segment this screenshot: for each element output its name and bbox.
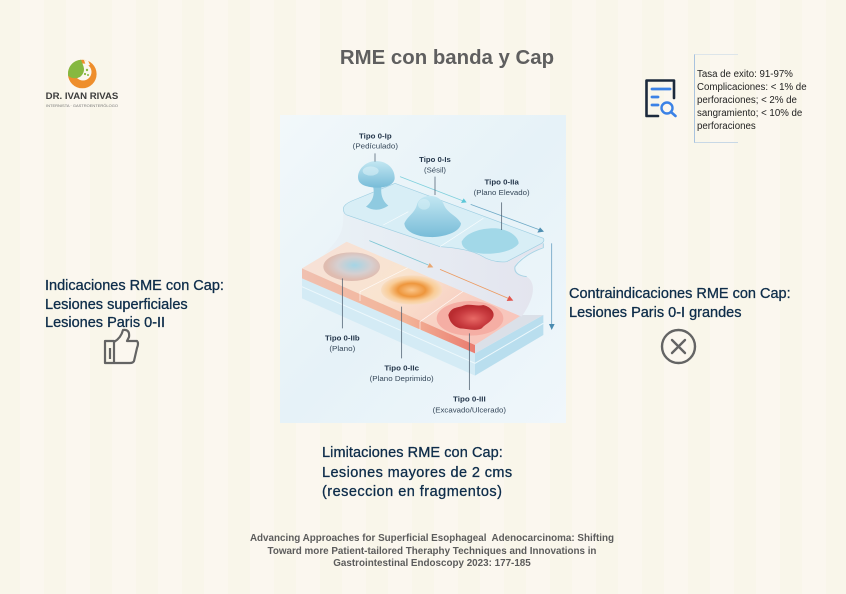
central diagram: Paris classification <box>280 115 566 423</box>
logo: Dr. Ivan Rivas: DR. IVAN RIVAS <box>46 90 118 102</box>
lesion 0-IIc <box>381 275 442 305</box>
stats text: Tasa de exito: 91-97% <box>697 69 793 80</box>
diagram labels: (Excavado/Ulcerado) <box>433 406 506 415</box>
stats text: Complicaciones: < 1% de <box>697 82 807 93</box>
base block <box>302 278 543 376</box>
contraindications text: Contraindicaciones RME con Cap: <box>569 286 791 302</box>
contraindications text: Lesiones Paris 0-I grandes <box>569 304 742 320</box>
diagram labels: (Plano Elevado) <box>474 188 530 197</box>
diagram labels: Tipo 0-Is <box>419 155 451 164</box>
reference citation: Toward more Patient-tailored Theraphy Techniques and Innovations in <box>268 546 596 556</box>
reference citation <box>250 533 614 569</box>
logo: Dr. Ivan Rivas <box>46 60 118 108</box>
indications text: Indicaciones RME con Cap: <box>45 278 224 294</box>
diagram labels: Tipo 0-IIb <box>325 334 360 343</box>
diagram labels: (Plano) <box>329 344 355 353</box>
stats text <box>697 69 807 132</box>
stats text: perforaciones; < 2% de <box>697 95 797 106</box>
diagram labels: Tipo 0-III <box>453 395 486 404</box>
title: RME con banda y Cap <box>340 47 554 69</box>
diagram labels: (Sésil) <box>424 166 446 175</box>
limitations text <box>322 445 513 500</box>
contraindications text <box>569 286 791 320</box>
icon: document search <box>645 79 677 118</box>
stats text: sangramiento; < 10% de <box>697 108 802 119</box>
mucosa surface <box>302 242 543 353</box>
logo: Dr. Ivan Rivas: INTERNISTA · GASTROENTERÓLOGO <box>46 102 118 108</box>
indications text <box>45 278 224 331</box>
lesion 0-IIb <box>323 252 380 281</box>
lesion 0-Ip <box>358 161 395 210</box>
diagram labels: (Pedículado) <box>353 142 398 151</box>
arrows <box>369 177 555 330</box>
diagram labels: Tipo 0-IIc <box>384 364 419 373</box>
limitations text: Lesiones mayores de 2 cms <box>322 464 513 480</box>
indications text: Lesiones Paris 0-II <box>45 315 165 331</box>
stats text box <box>694 54 738 143</box>
stats text: perforaciones <box>697 121 756 132</box>
icon: cross in circle <box>660 328 696 364</box>
reference citation: Advancing Approaches for Superficial Esophageal Adenocarcinoma: Shifting <box>250 533 614 544</box>
limitations text: Limitaciones RME con Cap: <box>322 445 503 461</box>
diagram labels: (Plano Deprimido) <box>370 374 434 383</box>
lesion 0-Is <box>404 196 461 237</box>
wall <box>323 208 543 317</box>
lesion 0-III <box>437 301 503 336</box>
icon: thumbs up <box>104 328 140 364</box>
upper raised shelf <box>343 183 544 277</box>
leader lines <box>342 153 502 390</box>
lesion 0-IIa <box>462 228 519 254</box>
diagram labels: Tipo 0-IIa <box>484 178 520 187</box>
limitations text: (reseccion en fragmentos) <box>322 484 502 500</box>
reference citation: Gastrointestinal Endoscopy 2023: 177-185 <box>333 558 531 569</box>
indications text: Lesiones superficiales <box>45 296 188 312</box>
diagram labels <box>325 131 530 415</box>
diagram labels: Tipo 0-Ip <box>359 131 392 140</box>
